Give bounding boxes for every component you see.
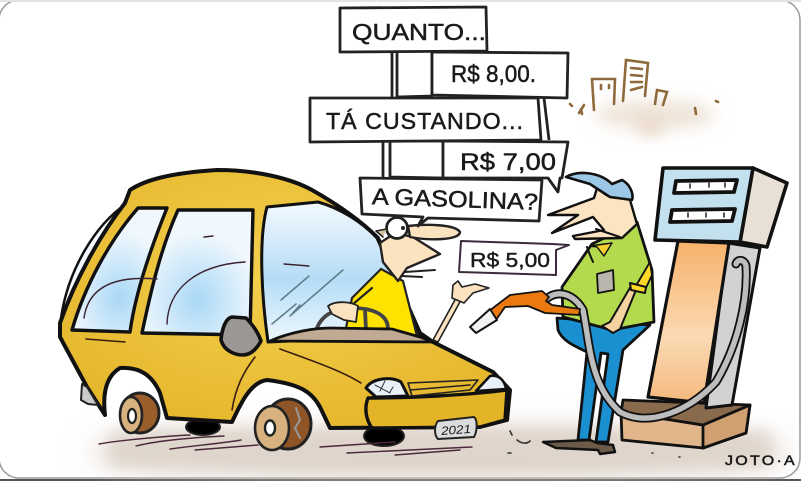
- box: quanto: QUANTO...: [352, 19, 486, 45]
- connector: quanto to ta custando: [392, 52, 432, 97]
- ground marks: [508, 431, 680, 457]
- driver head: [380, 233, 440, 281]
- fuel hose: [546, 260, 746, 418]
- box: R$ 7,00 with tail: R$ 7,00: [460, 149, 556, 176]
- box: R$ 8,00: R$ 8,00.: [451, 61, 536, 88]
- rear glass sliver: [61, 204, 126, 322]
- headlights: [366, 379, 408, 397]
- raised arm: [433, 298, 461, 342]
- car: [60, 170, 510, 455]
- box: R$ 8,00: [432, 52, 568, 98]
- rear wheel: [120, 393, 159, 433]
- box: ta custando: TÁ CUSTANDO...: [326, 108, 524, 134]
- nozzle and hose: [470, 260, 746, 418]
- pump orange body: [648, 241, 729, 403]
- grille: [408, 380, 478, 396]
- side window rear: [72, 208, 167, 332]
- bumper: [366, 390, 507, 428]
- windshield: [262, 202, 420, 342]
- glass reflections: [84, 236, 309, 324]
- raised hand: [452, 281, 489, 303]
- front wheel: [255, 399, 311, 450]
- driver: [317, 218, 489, 342]
- driver nose: [408, 225, 460, 239]
- speech sequence: dialogue boxes: [310, 7, 569, 275]
- car body: [60, 170, 510, 428]
- dashboard: [270, 328, 433, 342]
- pump head side: [740, 168, 787, 247]
- ground shadow: [90, 430, 790, 474]
- side mirror: [221, 317, 261, 355]
- side window middle: [142, 210, 253, 335]
- attendant face: [548, 188, 637, 239]
- box: ta custando: [310, 98, 541, 142]
- signature: JOTO·A: [725, 452, 797, 468]
- box: a gasolina with tail: [360, 178, 542, 226]
- box: a gasolina with tail: A GASOLINA?: [372, 183, 538, 215]
- driver glasses: [386, 218, 408, 238]
- box: R$ 7,00 with tail: [443, 141, 568, 192]
- under-car wheels: [186, 419, 404, 446]
- door line and hood line: [86, 339, 361, 410]
- pump side panel: [706, 243, 760, 408]
- background city skyline: [570, 60, 718, 135]
- driver hand: [328, 302, 358, 322]
- nozzle body: [489, 291, 580, 320]
- steering wheel: [317, 308, 388, 330]
- nozzle tip: [470, 309, 497, 333]
- fuel pump: [621, 168, 787, 448]
- box: quanto: [340, 7, 487, 52]
- pump base: [621, 400, 750, 448]
- connector: ta custando to a gasolina: [383, 140, 443, 178]
- attendant arm: [602, 286, 636, 333]
- attendant shoes: [543, 440, 615, 454]
- driver shirt: [346, 269, 417, 336]
- road speed lines: [99, 435, 472, 455]
- pump head front: [655, 168, 753, 242]
- attendant: [543, 173, 654, 454]
- box: R$ 5,00 with tail: [459, 241, 569, 275]
- attendant cap: [566, 173, 633, 200]
- license plate: 2021: [439, 422, 471, 438]
- connector: right side: [544, 98, 549, 140]
- shirt pocket: [597, 270, 614, 293]
- attendant trousers: [557, 318, 650, 442]
- box: R$ 5,00 with tail: R$ 5,00: [470, 250, 550, 272]
- rear bumper: [81, 384, 98, 405]
- attendant shirt: [562, 222, 654, 330]
- license plate: [435, 417, 477, 439]
